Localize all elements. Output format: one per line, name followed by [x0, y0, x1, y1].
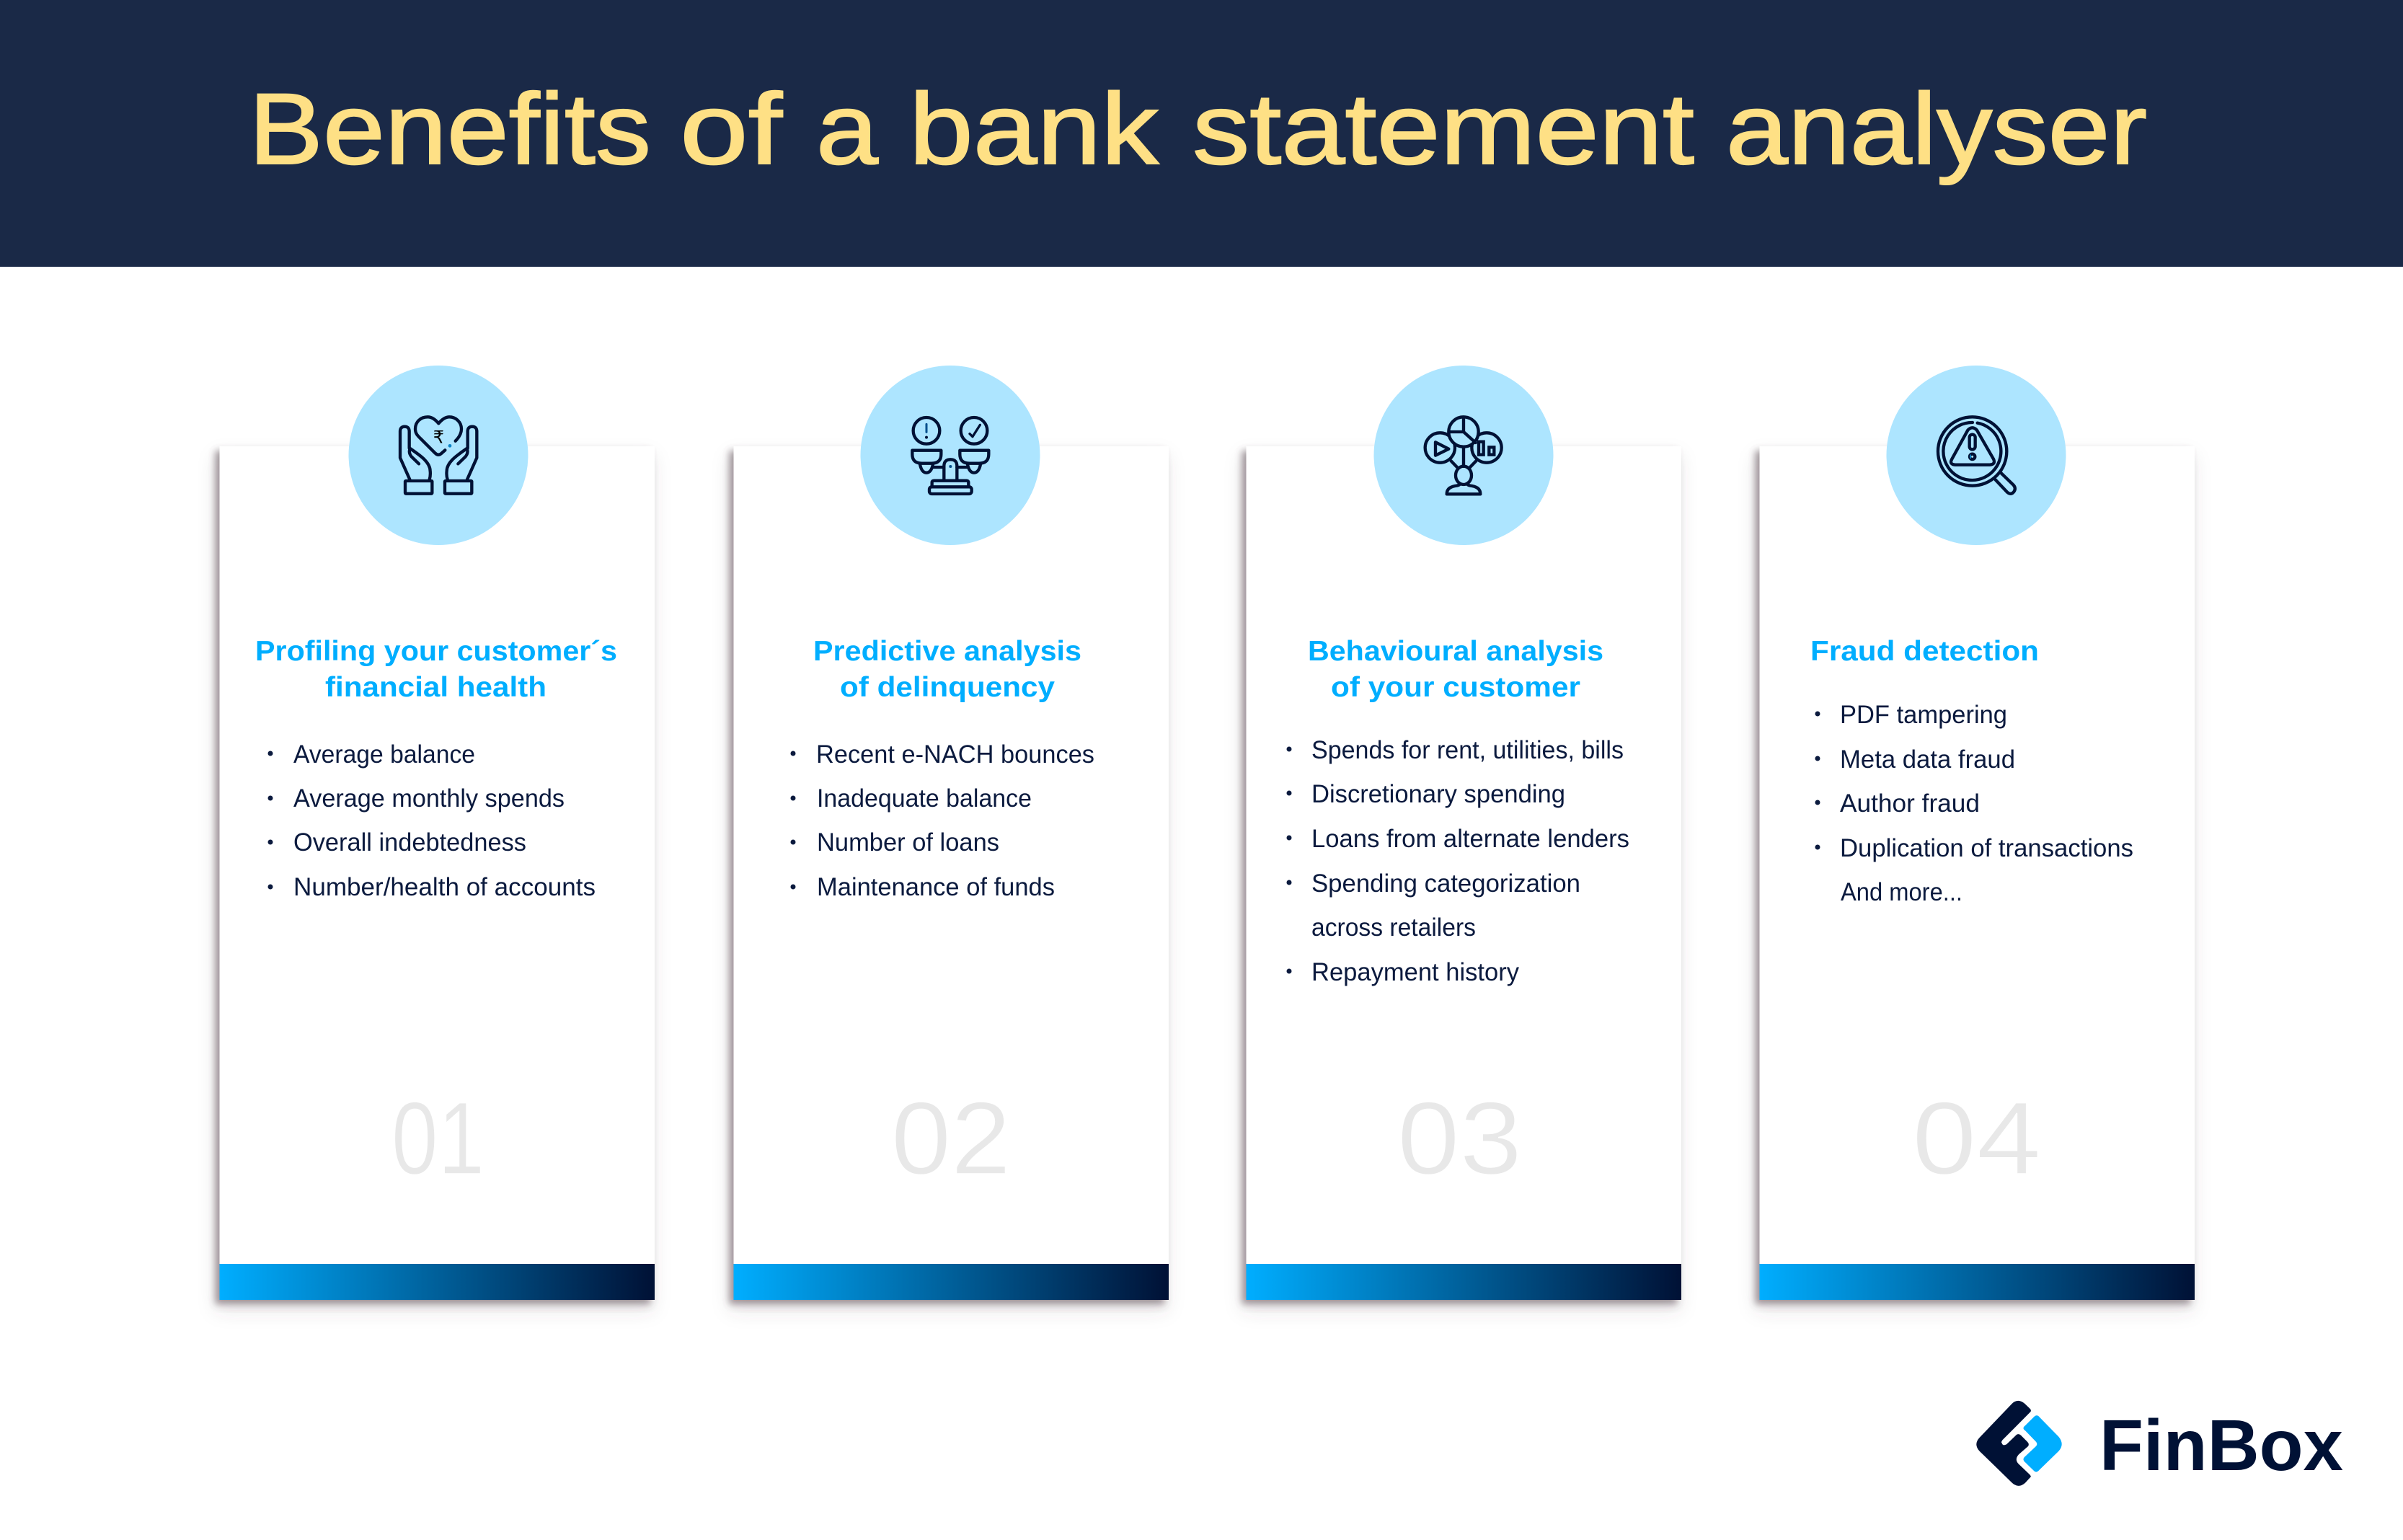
- panel: card 3: [1246, 366, 1681, 1300]
- card 2 icon circle: [861, 366, 1040, 545]
- icon: balance scale: [912, 417, 988, 494]
- panel: card 2: [734, 366, 1169, 1300]
- card 1 number: 01: [391, 1081, 484, 1196]
- card 1 bullet list: [268, 740, 596, 901]
- title: of: [680, 72, 783, 185]
- title: a: [816, 72, 878, 185]
- card 2 number: 02: [891, 1081, 1011, 1196]
- card 3 gradient bar: [1246, 1264, 1681, 1300]
- card 3 number: 03: [1397, 1081, 1522, 1196]
- title: bank: [909, 72, 1159, 185]
- card 4 gradient bar: [1759, 1264, 2195, 1300]
- logo: FinBox: [1976, 1401, 2343, 1486]
- card 1 bullet list: Overall indebtedness: [293, 828, 526, 857]
- card 4 number: 04: [1912, 1081, 2041, 1196]
- icon: magnifier with warning: [1938, 417, 2015, 494]
- title: statement: [1192, 72, 1694, 185]
- card 2 heading: of delinquency: [840, 672, 1055, 703]
- title: analyser: [1726, 72, 2147, 185]
- icon: hands holding heart with rupee: [400, 417, 477, 494]
- card 1 background: [219, 446, 655, 1300]
- card 3 heading: of your customer: [1331, 672, 1580, 703]
- card 2 gradient bar: [734, 1264, 1169, 1300]
- card 3 bullet list: [1286, 735, 1629, 986]
- card 1 bullet list: Average monthly spends: [293, 784, 565, 813]
- card 4 bullet list: And more...: [1841, 877, 1962, 906]
- card 1 icon circle: [349, 366, 528, 545]
- card 1 gradient bar: [219, 1264, 655, 1300]
- card 3 bullet list: Spending categorization: [1311, 869, 1580, 898]
- card 2 bullet list: [790, 740, 1094, 901]
- card 4 background: [1759, 446, 2195, 1300]
- card 3 bullet list: Repayment history: [1311, 957, 1519, 986]
- card 2 bullet list: Maintenance of funds: [817, 872, 1055, 901]
- card 3 bullet list: Loans from alternate lenders: [1311, 824, 1629, 853]
- icon: customer with charts: [1425, 417, 1502, 494]
- card 1 heading: financial health: [325, 672, 546, 703]
- card 2 bullet list: Inadequate balance: [817, 784, 1032, 813]
- card 4 bullet list: PDF tampering: [1840, 700, 2007, 729]
- title: Benefits: [249, 72, 651, 185]
- card 3 bullet list: Discretionary spending: [1311, 779, 1565, 808]
- card 1 bullet list: Number/health of accounts: [293, 872, 596, 901]
- card 3 bullet list: Spends for rent, utilities, bills: [1311, 735, 1624, 764]
- card 4 bullet list: Duplication of transactions: [1840, 833, 2133, 862]
- card 4 bullet list: [1815, 700, 2133, 906]
- card 4 bullet list: Author fraud: [1840, 789, 1980, 818]
- card 4 heading: Fraud detection: [1810, 636, 2039, 667]
- card 1 bullet list: Average balance: [293, 740, 475, 769]
- card 3 icon circle: [1374, 366, 1553, 545]
- card 3 bullet list: across retailers: [1311, 913, 1476, 942]
- panel: card 4: [1759, 366, 2195, 1300]
- logo mark: [1976, 1401, 2062, 1486]
- card 1 heading: Profiling your customer´s: [255, 636, 617, 667]
- card 2 bullet list: Recent e-NACH bounces: [816, 740, 1094, 769]
- logo wordmark: FinBox: [2099, 1405, 2343, 1486]
- card 3 background: [1246, 446, 1681, 1300]
- card 4 icon circle: [1886, 366, 2066, 545]
- icon: hands holding heart with rupee: ₹: [433, 428, 444, 448]
- card 3 heading: Behavioural analysis: [1308, 636, 1603, 667]
- card 2 heading: Predictive analysis: [813, 636, 1081, 667]
- header banner: [0, 0, 2403, 267]
- card 2 bullet list: Number of loans: [817, 828, 999, 857]
- panel: card 1: [219, 366, 655, 1300]
- card 2 background: [734, 446, 1169, 1300]
- card 4 bullet list: Meta data fraud: [1840, 745, 2015, 774]
